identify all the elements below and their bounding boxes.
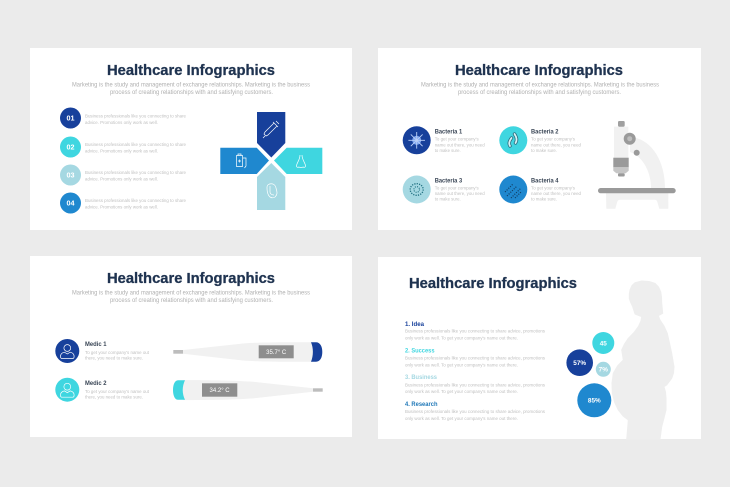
bubble 57%	[566, 349, 593, 376]
list item 3: Business professionals like you connecting to share advice, promotions	[405, 382, 546, 387]
bacteria 4: name out there, you need	[531, 191, 581, 196]
panel: numbered list and cross	[30, 48, 352, 230]
list item 1: only work as well. To get your company's name out there.	[405, 336, 518, 340]
list item 4: 4. Research	[405, 401, 438, 408]
list item 04: 04	[66, 199, 74, 208]
subtitle: process of creating relationships with and satisfying customers.	[110, 89, 273, 96]
list item 3	[405, 374, 546, 394]
medic 2	[55, 378, 150, 402]
subtitle: Marketing is the study and management of exchange relationships. Marketing is the business	[72, 290, 311, 296]
bacteria 4: to make sure.	[531, 197, 557, 202]
bubble 85%: 85%	[588, 398, 601, 405]
list item 02: 02	[66, 143, 74, 152]
bacteria 3: name out there, you need	[435, 191, 485, 196]
list item 1: Business professionals like you connecting to share advice, promotions	[405, 329, 546, 334]
bacteria 1: to make sure.	[435, 148, 461, 153]
medic 2: To get your company's name out	[85, 389, 150, 394]
arrow: top with syringe icon	[257, 112, 285, 158]
bubble 7%	[596, 362, 611, 377]
list item 03: advice. Promotions only work as well.	[85, 176, 158, 181]
list item 2: Business professionals like you connecting to share advice, promotions	[405, 356, 546, 361]
panel: pregnancy silhouette	[378, 257, 701, 439]
list item 3: 3. Business	[405, 374, 437, 381]
list item 4: only work as well. To get your company's name out there.	[405, 416, 518, 421]
bubble 85%	[577, 383, 611, 417]
list item 1	[405, 321, 546, 340]
medic 1	[55, 339, 150, 363]
bacteria 2: To get your company's	[531, 137, 576, 142]
subtitle: process of creating relationships with and satisfying customers.	[110, 297, 273, 304]
bacteria 3	[403, 176, 485, 204]
bacteria 4	[499, 176, 581, 204]
title: Healthcare Infographics	[409, 275, 577, 292]
bacteria 4: Bacteria 4	[531, 178, 559, 184]
arrow: left with medical bag icon	[220, 148, 269, 174]
silhouette	[612, 281, 674, 439]
bacteria 2: to make sure.	[531, 148, 557, 153]
thermometer 1	[173, 342, 322, 362]
list item 03: Business professionals like you connecting to share	[85, 170, 186, 175]
bacteria 1: name out there, you need	[435, 142, 485, 147]
list item 01: Business professionals like you connecting to share	[85, 114, 186, 118]
thermometer 2: 34.2° C	[210, 388, 230, 394]
list item 4	[405, 401, 546, 421]
medic 2: there, you need to make sure.	[85, 394, 143, 399]
list item 2: only work as well. To get your company's name out there.	[405, 362, 518, 367]
medic 2: Medic 2	[85, 380, 107, 387]
bubble 45: 45	[600, 340, 607, 347]
list item 4: Business professionals like you connecting to share advice, promotions	[405, 409, 546, 414]
arrow: bottom with ear icon	[257, 163, 285, 210]
bubble 57%: 57%	[573, 360, 586, 367]
list item 3: only work as well. To get your company's name out there.	[405, 389, 518, 394]
list item 01	[60, 108, 186, 128]
bubble 45	[592, 332, 614, 354]
medic 1: To get your company's name out	[85, 350, 150, 355]
thermometer 1: 35.7° C	[266, 350, 287, 356]
list item 03	[60, 164, 186, 186]
subtitle	[72, 290, 311, 304]
bacteria 1: Bacteria 1	[435, 128, 463, 136]
icon: microscope	[598, 121, 676, 209]
title: Healthcare Infographics	[107, 62, 275, 79]
bacteria 2: name out there, you need	[531, 142, 581, 147]
title: Healthcare Infographics	[107, 270, 275, 287]
list item 04: advice. Promotions only work as well.	[85, 205, 158, 210]
list item 2	[405, 348, 546, 367]
bacteria 4: To get your company's	[531, 186, 576, 190]
bubble 7%: 7%	[599, 367, 608, 374]
cross diagram	[220, 112, 322, 210]
list item 2: 2. Success	[405, 348, 435, 354]
subtitle: Marketing is the study and management of exchange relationships. Marketing is the business	[72, 82, 311, 88]
list item 1: 1. Idea	[405, 321, 424, 328]
subtitle: process of creating relationships with and satisfying customers.	[458, 89, 621, 96]
list item 04: Business professionals like you connecting to share	[85, 198, 186, 203]
list item 04	[60, 192, 186, 214]
subtitle	[421, 82, 660, 96]
thermometer 2	[173, 380, 323, 400]
list item 01: 01	[66, 114, 74, 123]
medic 1: there, you need to make sure.	[85, 356, 143, 360]
list item 02: advice. Promotions only work as well.	[85, 148, 158, 154]
bacteria 2	[499, 126, 581, 154]
bacteria 3: To get your company's	[435, 186, 479, 190]
list item 01: advice. Promotions only work as well.	[85, 120, 158, 125]
bacteria 1	[403, 126, 485, 154]
bacteria 2: Bacteria 2	[531, 128, 559, 136]
bacteria 3: Bacteria 3	[435, 178, 463, 184]
title: Healthcare Infographics	[455, 62, 623, 79]
medic 1: Medic 1	[85, 341, 107, 348]
list item 02	[60, 136, 186, 158]
panel: bacteria and microscope	[378, 48, 701, 230]
bacteria 1: To get your company's	[435, 137, 479, 142]
list item 02: Business professionals like you connecting to share	[85, 142, 186, 147]
subtitle	[72, 82, 311, 96]
subtitle: Marketing is the study and management of exchange relationships. Marketing is the business	[421, 82, 660, 88]
arrow: right with nose icon	[274, 148, 322, 174]
bacteria 3: to make sure.	[435, 197, 461, 202]
list item 03: 03	[66, 171, 74, 180]
panel: medics and thermometers	[30, 256, 352, 437]
